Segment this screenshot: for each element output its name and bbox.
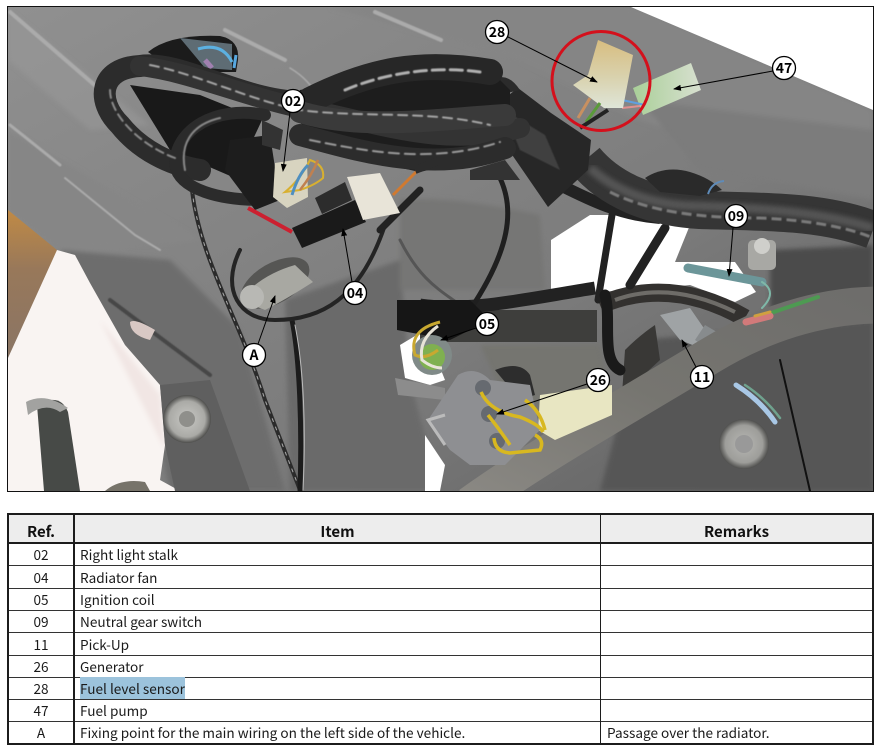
connector 04 area (247, 170, 424, 248)
connector 11: pick-up (660, 308, 716, 345)
row 26: Generator (80, 656, 144, 676)
row 47 (9, 699, 872, 722)
table header: Remarks (704, 521, 769, 542)
row 09: 09 (33, 611, 49, 631)
callout 11 (682, 340, 714, 388)
table: reference items (7, 513, 874, 745)
callout 26: 26 (590, 370, 606, 390)
connector 02 area (225, 120, 323, 210)
red circle highlight (552, 32, 650, 130)
green and pink wires over tube (746, 297, 818, 322)
grey tube: dark hose (420, 288, 745, 395)
connector 26: generator (428, 366, 612, 465)
callout 04 (343, 229, 366, 304)
connector 47 (622, 63, 701, 115)
row 09: Neutral gear switch (80, 611, 202, 631)
row 02 (9, 543, 872, 566)
background: brown tank area (8, 210, 57, 358)
callout 05 (441, 312, 498, 340)
row 02: Right light stalk (80, 544, 178, 564)
callout 28 (486, 20, 597, 82)
harness: rear run and tape block (470, 77, 873, 238)
row 11: Pick-Up (80, 634, 129, 654)
thin wires from harness (192, 178, 810, 491)
callout 05: 05 (479, 314, 495, 334)
row A (37, 722, 770, 742)
row 47: 47 (33, 700, 49, 720)
row 28: 28 (33, 678, 49, 698)
background: pressed ridges (10, 12, 441, 375)
row 28 (9, 677, 872, 700)
connector 05: ignition coil (397, 300, 490, 375)
callout A: A (249, 345, 260, 365)
row 04: Radiator fan (80, 567, 157, 587)
background: grey frame (8, 7, 873, 491)
callout A (242, 296, 275, 366)
background: white gaps (395, 7, 873, 491)
table header: Item (320, 521, 355, 542)
harness: front loop and bundle (105, 60, 520, 200)
clamp A (240, 257, 313, 310)
reservoir: white plastic tank (8, 250, 180, 491)
callout 47 (674, 56, 796, 89)
row 05: Ignition coil (80, 589, 155, 609)
row 26 (9, 655, 872, 678)
row 11 (9, 633, 872, 656)
callout 47: 47 (776, 58, 792, 78)
row 04: 04 (33, 567, 49, 587)
row 47: Fuel pump (80, 700, 148, 720)
row 09 (9, 610, 872, 633)
photo: motorcycle wiring harness with callouts (7, 6, 874, 492)
callout 04: 04 (347, 283, 363, 303)
callout 09 (724, 204, 748, 276)
row 11: 11 (33, 634, 49, 654)
row 05: 05 (33, 589, 49, 609)
connector 28 (573, 40, 633, 128)
callout 11: 11 (694, 367, 710, 387)
callout 26 (497, 368, 610, 414)
opening with colored wires at top (148, 36, 238, 72)
table header: Ref. (27, 521, 55, 542)
callout 02 (282, 90, 304, 171)
photo frame (8, 6, 874, 492)
callout 02: 02 (285, 91, 301, 111)
row A: Passage over the radiator. (607, 722, 770, 742)
row 26: 26 (33, 656, 49, 676)
grey main tube (470, 305, 880, 505)
table header (9, 515, 872, 544)
row 04 (9, 566, 872, 589)
row A: Fixing point for the main wiring on the left side of the vehicle. (80, 722, 465, 742)
callout 28: 28 (489, 22, 505, 42)
row 05 (9, 588, 872, 611)
row 02: 02 (33, 544, 49, 564)
callout 09: 09 (728, 206, 744, 226)
bolts (160, 238, 776, 491)
row 28: Fuel level sensor (80, 678, 185, 698)
row A: A (37, 722, 45, 742)
